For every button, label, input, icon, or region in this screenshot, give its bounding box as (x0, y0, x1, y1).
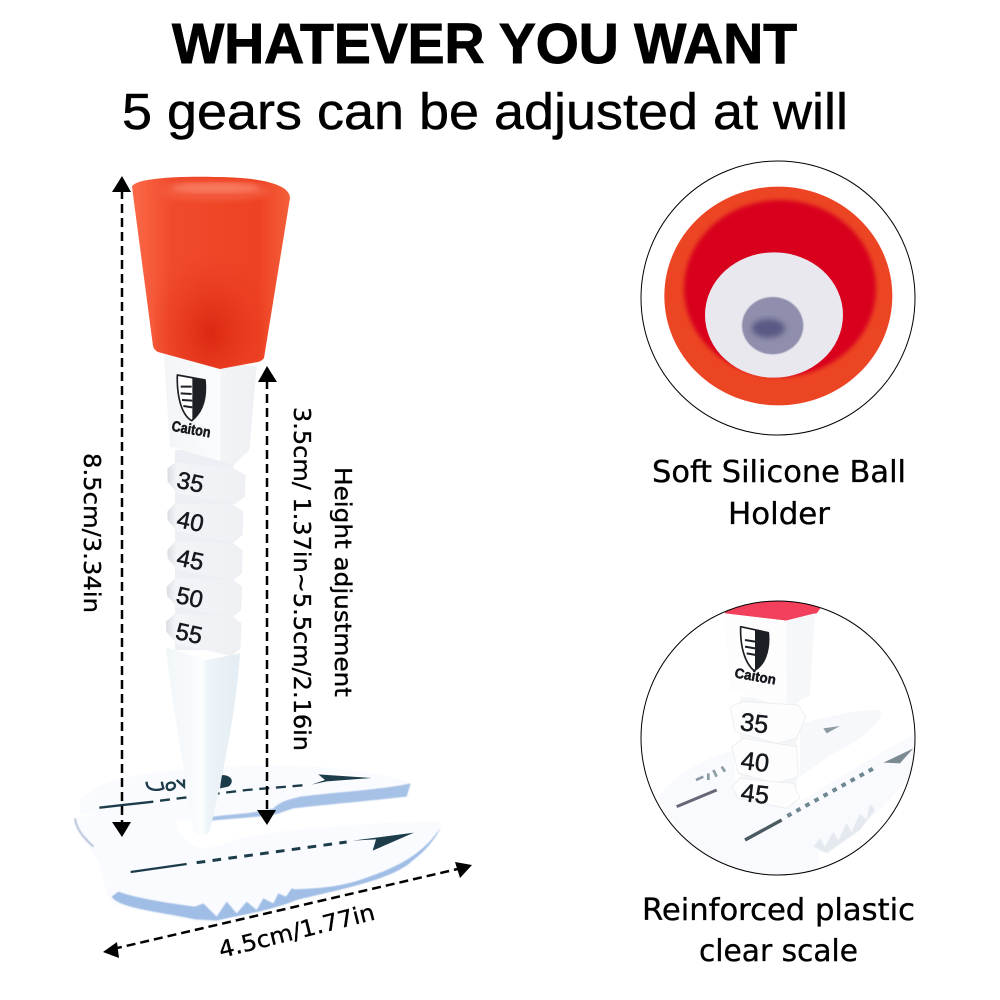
detail: block 35 (730, 702, 806, 743)
logo: wordmark: Caiton (170, 419, 212, 441)
scale block 40 (167, 503, 243, 543)
white seat (705, 252, 843, 378)
arrow: total height (112, 176, 131, 837)
caption: ball holder: Holder (728, 497, 831, 532)
subtitle: 5 gears can be adjusted at will (122, 83, 848, 140)
detail: back wing (800, 710, 881, 777)
caption: scale detail (642, 893, 915, 969)
label: base width: 4.5cm/1.77in (216, 900, 378, 964)
detail: block 45: 45 (739, 779, 771, 810)
scale block 45 (167, 542, 243, 581)
detail: block 40 (732, 738, 798, 783)
detail: stem head (724, 613, 815, 708)
dark hole (742, 297, 803, 354)
scale block 45: 45 (174, 544, 206, 576)
base upper wing (80, 765, 411, 821)
logo: shield (177, 375, 205, 421)
base lower wing (75, 815, 442, 922)
holder outer rim (664, 187, 892, 405)
scale block 50: 50 (174, 582, 205, 614)
label: height range: 3.5cm/ 1.37in~5.5cm/2.16in (288, 407, 314, 751)
holder inner cone (684, 200, 876, 377)
panel: scale detail (641, 600, 917, 877)
title: WHATEVER YOU WANT (172, 12, 797, 76)
detail: shield logo (741, 627, 769, 671)
scale block 55: 55 (173, 618, 205, 650)
detail: wordmark: Caiton (733, 665, 777, 688)
label: height adjustment: Height adjustment (329, 467, 355, 697)
golf tee base (75, 765, 442, 922)
caption: ball holder (652, 455, 906, 532)
scale block 50 (167, 578, 242, 617)
arrow: base width (103, 862, 472, 958)
scale block 35: 35 (174, 467, 206, 499)
scale block 35 (167, 463, 246, 504)
golf tee spike (166, 647, 240, 835)
arrow: height adjustment range (257, 366, 277, 825)
caption: scale detail: clear scale (699, 934, 858, 969)
detail: stem column (740, 697, 797, 790)
caption: scale detail: Reinforced plastic (642, 893, 915, 928)
detail: tee base (658, 733, 917, 877)
caption: ball holder: Soft Silicone Ball (652, 455, 906, 490)
detail: block 35: 35 (739, 708, 770, 739)
detail: red cup edge (725, 602, 820, 620)
golf tee stem with scale (164, 355, 257, 656)
panel: ball holder detail (641, 161, 915, 435)
red silicone cup (132, 177, 290, 369)
scale block 55 (166, 614, 241, 656)
detail: block 45 (732, 778, 800, 810)
label: total height: 8.5cm/3.34in (78, 453, 106, 613)
scale block 40: 40 (174, 506, 206, 538)
detail: block 40: 40 (739, 747, 771, 778)
